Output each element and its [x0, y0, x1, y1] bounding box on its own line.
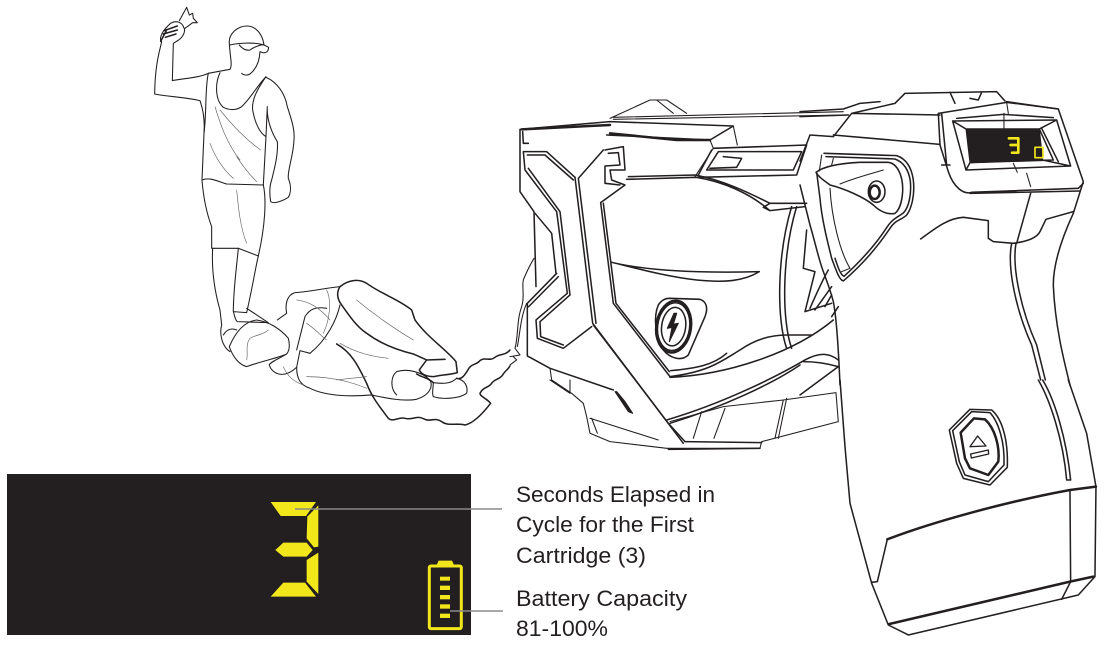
- side crease: [612, 262, 759, 281]
- underside vents: [550, 368, 838, 448]
- battery icon: [429, 561, 461, 629]
- mini digit 3: [1009, 138, 1018, 153]
- battery pack seams: [887, 487, 1096, 624]
- trigger: [803, 230, 838, 317]
- label: seconds elapsed: Cycle for the First: [516, 512, 694, 537]
- mini display screen: [966, 129, 1043, 163]
- illustration: man lying on the ground with probe wires: [229, 280, 510, 425]
- bolt emblem: [653, 298, 707, 359]
- label: battery capacity: [516, 586, 687, 641]
- label: seconds elapsed: Cartridge (3): [516, 543, 646, 568]
- display bezel: [953, 114, 1071, 170]
- label: seconds elapsed: Seconds Elapsed in: [516, 482, 715, 507]
- probe wires at device: [510, 258, 534, 365]
- selector knob: [868, 181, 885, 202]
- illustration: device grip and display housing: [800, 92, 1083, 385]
- grip ridge: [921, 193, 1073, 380]
- grip outline: [840, 380, 1096, 635]
- leader line: battery: [450, 610, 503, 612]
- body outline upper: [800, 92, 1083, 385]
- safety switch: [816, 153, 914, 281]
- front face recess: [523, 152, 592, 348]
- digit 3: [271, 502, 318, 597]
- panel: enlarged display: [7, 474, 471, 635]
- mini battery: [1035, 147, 1043, 158]
- lower side panel: [670, 207, 833, 377]
- display housing: [938, 102, 1083, 193]
- notch and side panel: [601, 147, 670, 377]
- label: battery capacity: Battery Capacity: [516, 586, 687, 611]
- top deck: [610, 100, 843, 177]
- leader line: seconds: [295, 508, 502, 510]
- illustration: device lower grip with eject button: [840, 380, 1096, 635]
- illustration: device rear housing: [510, 100, 843, 449]
- center bar: [575, 150, 683, 443]
- label: battery capacity: 81-100%: [516, 616, 608, 641]
- front face outline: [520, 122, 733, 442]
- illustration: standing man with bottle: [155, 7, 294, 352]
- label: seconds elapsed: [516, 482, 715, 568]
- eject button: [949, 409, 1007, 485]
